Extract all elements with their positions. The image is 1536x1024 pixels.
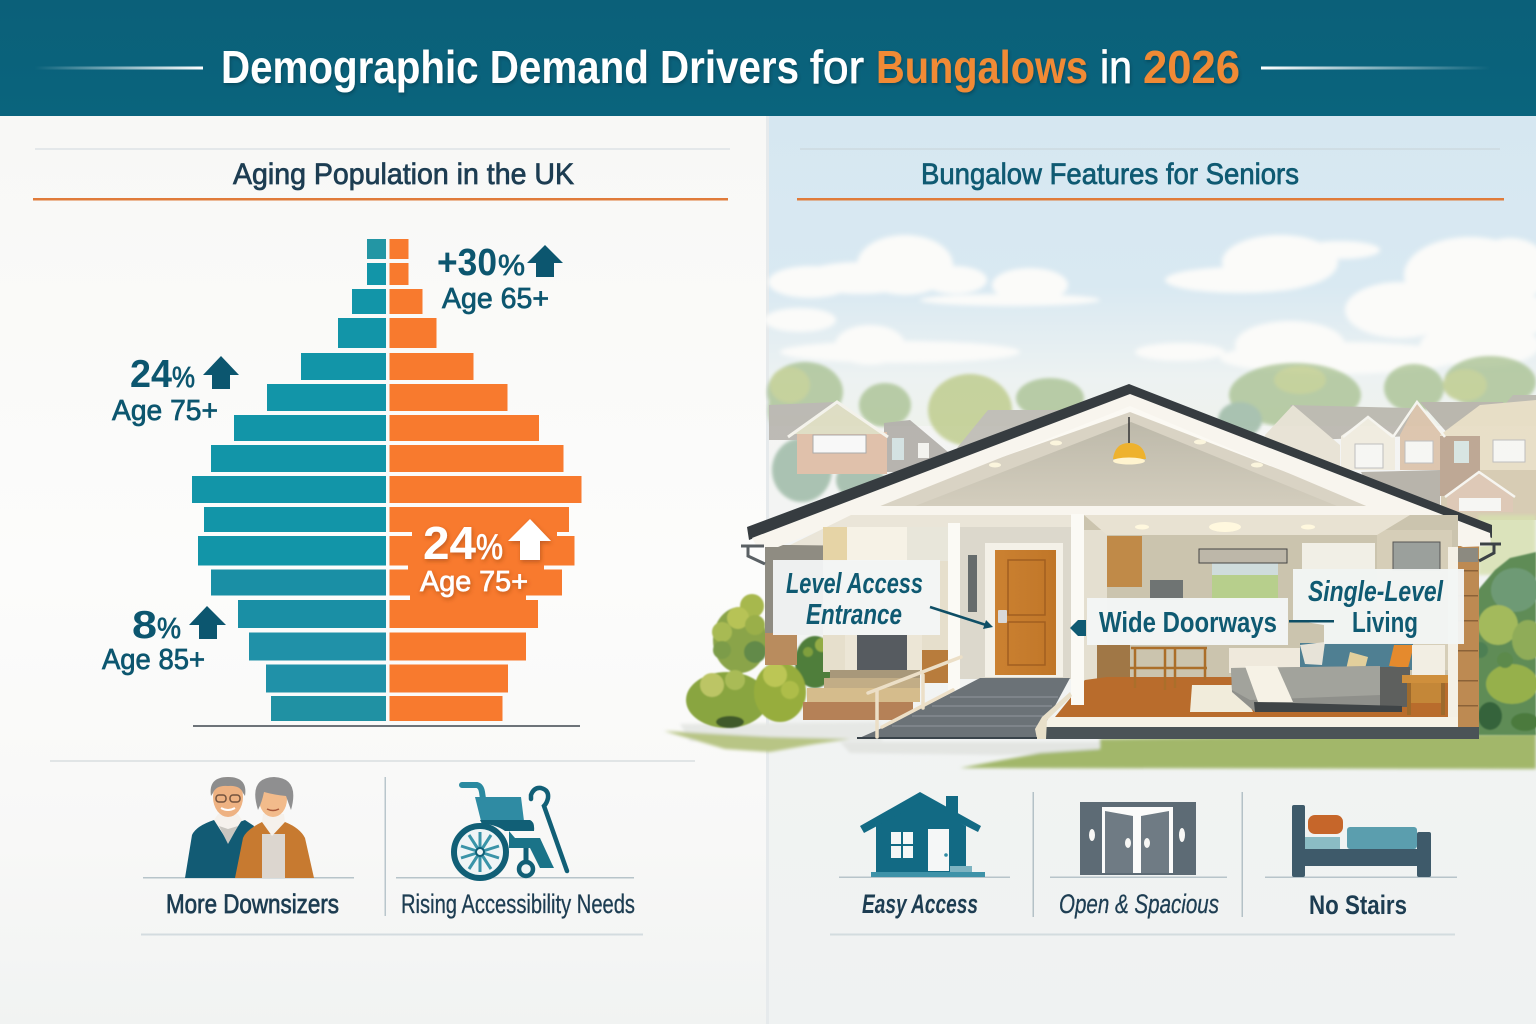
clouds bbox=[764, 235, 1536, 374]
label: level access entrance: Entrance bbox=[806, 599, 902, 631]
left bushes bbox=[686, 594, 835, 728]
label: single-level living bbox=[1293, 569, 1464, 644]
dining set bbox=[1130, 648, 1207, 690]
roof bbox=[747, 384, 1492, 540]
connector: single-level bbox=[1289, 620, 1334, 622]
right bush bbox=[1472, 552, 1536, 735]
callout: 24% age 75+: 24 bbox=[130, 353, 172, 396]
entry wall bbox=[960, 527, 1071, 679]
callout: 24% age 75+ bbox=[112, 353, 239, 427]
callout: +30% age 65+: Age 65+ bbox=[442, 283, 549, 315]
callout: 24% age 75+: % bbox=[172, 362, 195, 394]
label: level access entrance: Level Access bbox=[786, 568, 923, 600]
title banner: for bbox=[810, 41, 864, 93]
label: single-level living: Single-Level bbox=[1308, 576, 1444, 608]
callout: 24% age 75+: Age 75+ bbox=[112, 395, 218, 427]
icon: open double doors bbox=[1080, 802, 1196, 875]
label: wide doorways bbox=[1087, 598, 1288, 645]
title banner: Bungalows bbox=[876, 41, 1088, 93]
label: open and spacious: Open & Spacious bbox=[1059, 889, 1219, 919]
icon: wheelchair and cane bbox=[454, 785, 567, 878]
label: more downsizers: More Downsizers bbox=[166, 889, 339, 919]
label: wide doorways: Wide Doorways bbox=[1099, 607, 1277, 639]
far left house bbox=[769, 402, 1075, 474]
panel: right background bbox=[764, 116, 1536, 1024]
left interior bbox=[823, 527, 948, 672]
callout: 24% age 75+ on orange bbox=[420, 517, 551, 598]
floor bbox=[1055, 677, 1451, 717]
label: level access entrance bbox=[773, 560, 940, 635]
arrow: to doorway bbox=[1070, 620, 1086, 636]
callout: 24% age 75+ on orange: % bbox=[476, 528, 503, 567]
population pyramid chart bbox=[192, 239, 582, 727]
label: rising accessibility needs: Rising Accessibility Needs bbox=[401, 889, 635, 919]
illustration: neighbourhood background bbox=[767, 356, 1536, 520]
label: easy access: Easy Access bbox=[862, 889, 978, 919]
side walls bbox=[765, 545, 825, 635]
panel: left background bbox=[0, 116, 768, 1024]
ramp handrail bbox=[868, 657, 961, 737]
title banner: 2026 bbox=[1143, 41, 1240, 93]
path and lawn bbox=[664, 722, 1536, 769]
trees bbox=[767, 356, 1536, 510]
heading: bungalow features: Bungalow Features for Seniors bbox=[921, 158, 1299, 191]
illustration: bungalow cutaway bbox=[741, 384, 1501, 739]
callout: +30% age 65+: +30 bbox=[437, 242, 497, 284]
ramp bbox=[857, 678, 1072, 739]
icon: bed bbox=[1292, 805, 1431, 877]
room bbox=[1084, 515, 1458, 685]
front door bbox=[995, 550, 1056, 675]
callout: 8% age 85+: % bbox=[157, 613, 181, 645]
gable bbox=[849, 405, 1410, 510]
icon: house bbox=[860, 792, 985, 877]
far right houses bbox=[1265, 395, 1536, 520]
side table bbox=[1402, 675, 1448, 715]
callout: 8% age 85+ bbox=[102, 604, 226, 676]
callout: +30% age 65+ bbox=[437, 242, 563, 315]
ceiling lamp bbox=[1113, 417, 1146, 464]
callout: 8% age 85+: 8 bbox=[132, 604, 157, 647]
ceiling beam bbox=[851, 506, 1401, 515]
heading: aging population: Aging Population in the UK bbox=[233, 158, 574, 191]
gutters bbox=[741, 546, 765, 564]
callout: 8% age 85+: Age 85+ bbox=[102, 644, 205, 676]
base and pillars bbox=[1071, 514, 1084, 705]
title banner: Demographic Demand Drivers bbox=[221, 41, 799, 93]
callout: +30% age 65+: % bbox=[498, 250, 525, 282]
entrance steps bbox=[803, 670, 920, 720]
title banner bbox=[0, 0, 1536, 116]
callout: 24% age 75+ on orange: 24 bbox=[423, 517, 476, 569]
label: no stairs: No Stairs bbox=[1309, 890, 1407, 920]
icon: senior couple bbox=[185, 777, 314, 878]
illustration: garden and right backdrop bbox=[664, 515, 1536, 769]
label: single-level living: Living bbox=[1352, 607, 1418, 639]
title banner: in bbox=[1100, 41, 1132, 93]
arrow: to front door bbox=[930, 607, 993, 629]
callout: 24% age 75+ on orange: Age 75+ bbox=[420, 566, 528, 598]
sofa bed bbox=[1229, 642, 1445, 712]
